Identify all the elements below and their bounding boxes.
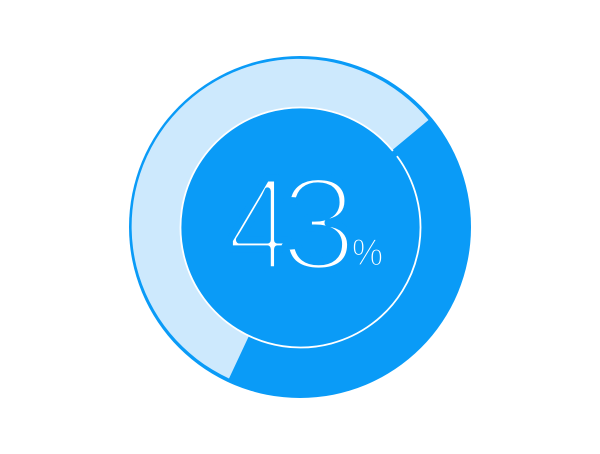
thin white inner ring <box>133 60 468 395</box>
percentage value: 43: 4 <box>227 150 292 299</box>
percentage value: 43: 3 <box>280 150 357 299</box>
percent sign: % <box>352 232 383 274</box>
inner blue disc <box>180 108 420 348</box>
light remaining arc segment <box>132 59 428 379</box>
percentage value: 43 <box>227 150 357 299</box>
outer blue disc <box>129 56 471 398</box>
donut chart: 43% <box>129 56 471 398</box>
